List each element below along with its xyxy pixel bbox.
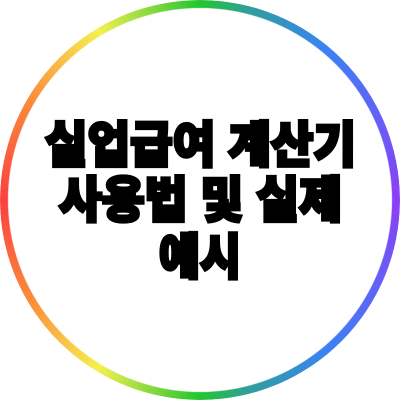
- title line 1: 실업급여 계산기: [45, 119, 356, 173]
- title line 3: 예시: [159, 231, 241, 285]
- title line 2: 사용법 및 실제: [59, 174, 342, 228]
